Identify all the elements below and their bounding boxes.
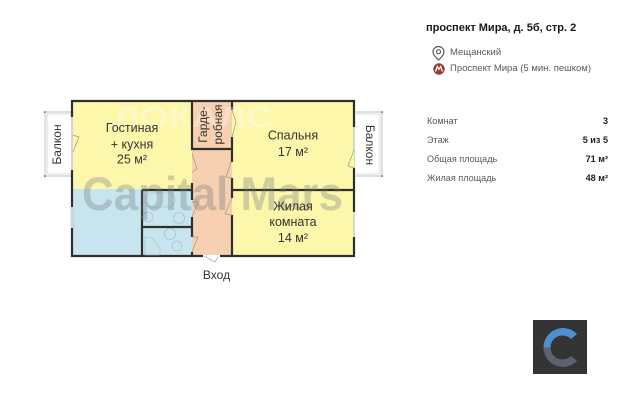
bathroom fixtures — [143, 193, 184, 255]
stats: living area: Жилая площадь — [427, 173, 496, 183]
room fills — [72, 101, 354, 255]
doors — [73, 110, 354, 262]
address heading: проспект Мира, д. 5б, стр. 2 — [426, 22, 576, 34]
room labels: Спальня — [268, 128, 318, 142]
value: living area: 48 м² — [586, 173, 608, 183]
room labels: 14 м² — [278, 231, 308, 245]
stats: rooms: Комнат — [427, 116, 458, 126]
rotated labels: Балкон — [363, 125, 377, 165]
floor plan — [44, 100, 383, 282]
value: rooms: 3 — [603, 116, 608, 126]
watermark: Capital Mars — [82, 167, 343, 220]
balcony corner posts — [44, 111, 383, 177]
rotated labels: Гарде- — [196, 106, 210, 143]
district: Мещанский — [450, 47, 501, 58]
stats: total area: Общая площадь — [427, 154, 497, 164]
room labels: Гостиная — [106, 121, 158, 135]
rotated labels: Балкон — [50, 124, 64, 165]
value: total area: 71 м² — [586, 154, 608, 164]
watermark top: ЛОКАЛС — [113, 102, 273, 134]
room labels: + кухня — [111, 138, 153, 152]
icon: location pin — [432, 46, 445, 61]
room labels: Жилая — [273, 200, 313, 214]
metro station: Проспект Мира (5 мин. пешком) — [450, 63, 591, 74]
walls — [72, 101, 354, 256]
room labels — [106, 121, 318, 282]
window gaps — [72, 117, 354, 237]
rotated labels: робная — [211, 104, 225, 145]
value: floor: 5 из 5 — [583, 135, 608, 145]
icon: metro — [433, 63, 445, 75]
balconies — [45, 112, 382, 176]
room labels: комната — [269, 215, 317, 229]
room labels: 25 м² — [117, 152, 147, 166]
stats: floor: Этаж — [427, 135, 449, 145]
room labels: 17 м² — [278, 145, 308, 159]
logo — [533, 320, 587, 374]
room labels: Вход — [203, 268, 230, 282]
rotated labels — [50, 104, 377, 165]
